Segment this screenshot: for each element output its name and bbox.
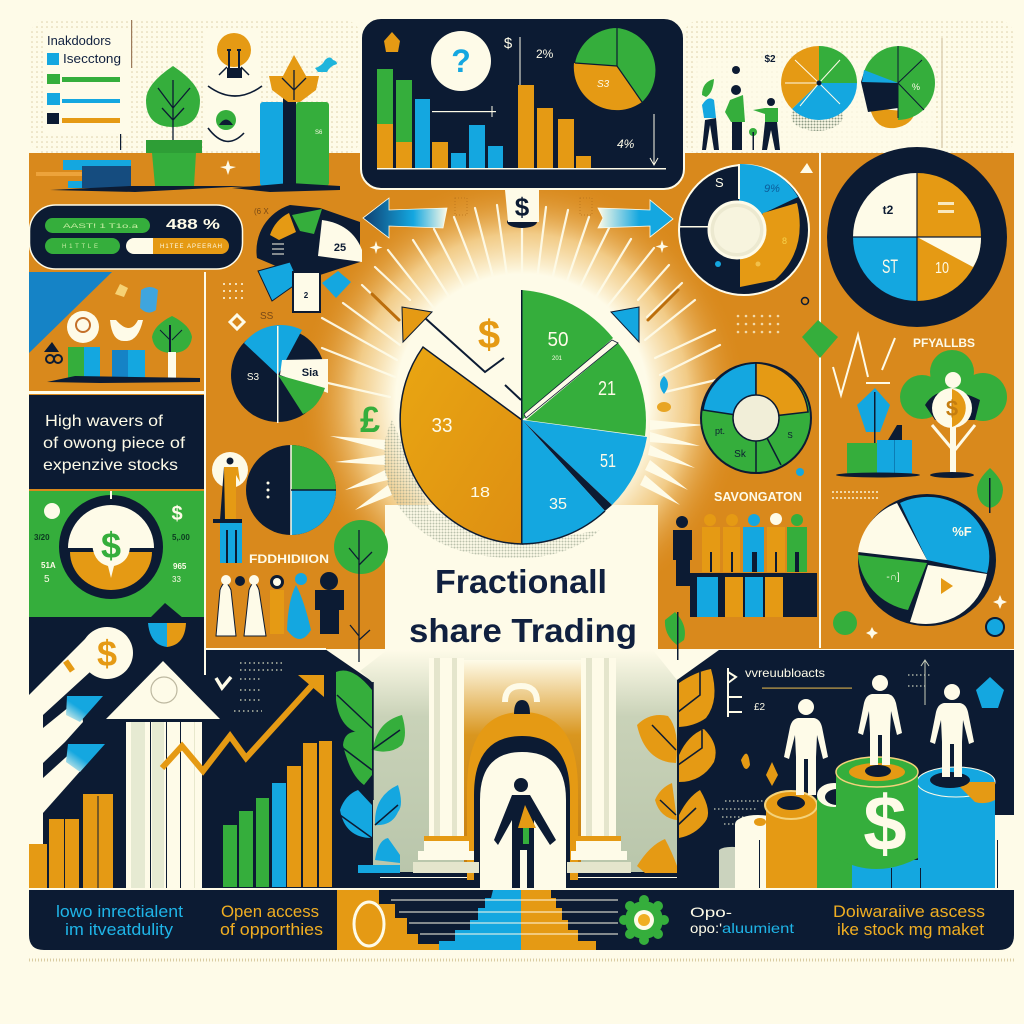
panel: stats pill	[30, 205, 242, 269]
text: downward access: ike stock mg maket	[837, 920, 984, 939]
bars right	[223, 741, 332, 887]
ground strip with boxes	[36, 160, 340, 192]
people figures	[784, 675, 974, 795]
panel: green savings circle: 3/20	[34, 533, 50, 542]
dotted footer line	[29, 958, 1015, 962]
text: open fulfilment: Opo-	[690, 904, 732, 920]
panel: dotted top background	[30, 20, 1014, 154]
panel: green savings circle: 33	[172, 575, 181, 584]
pie labels	[432, 329, 616, 513]
chart: big donut top right: ST	[882, 257, 898, 278]
icon: orange diamond	[384, 32, 400, 52]
chart: segmented gauge	[254, 205, 362, 312]
label: savonsaton: SAVONGATON	[714, 489, 802, 504]
title: Fractionall	[435, 563, 607, 600]
chart: segmented gauge: (6 X	[254, 207, 269, 216]
arrow: rising zigzag	[162, 675, 324, 771]
panel: stats pill: H1TEE APEERAH	[160, 244, 222, 250]
chart: pie with tag on left: Sia	[302, 367, 319, 379]
panel: high wavers text: of owong piece of	[43, 435, 186, 452]
chart: big donut top right	[827, 147, 1007, 327]
label: foundation: FDDHIDIION	[249, 554, 329, 566]
leaves right of arch	[637, 715, 692, 873]
chart: donut with centre circle: S	[715, 175, 724, 190]
panel: main orange background	[29, 153, 1014, 649]
orange leaves	[679, 669, 716, 838]
panel: green savings circle: 5,.00	[172, 533, 190, 542]
labels	[432, 35, 658, 165]
icon: kite and boxes	[836, 388, 920, 478]
central pie chart	[384, 290, 647, 558]
arrow and icons around central pie	[223, 283, 779, 440]
panel: arch with pillars	[360, 650, 706, 888]
label: header	[728, 666, 852, 717]
pie shadow	[384, 420, 600, 558]
cream central column	[385, 505, 658, 651]
dots	[714, 675, 930, 824]
icon: bell ornament	[505, 686, 537, 714]
icon: green diamond leaf	[802, 320, 838, 358]
pie labels: 51	[600, 451, 616, 471]
text: open fulfilment	[690, 904, 794, 936]
pie labels: 201	[552, 356, 563, 362]
arrow and icons around central pie: £	[360, 399, 380, 440]
legend	[47, 20, 132, 150]
chart: donut middle right: pt.	[715, 426, 725, 436]
chart: donut with centre circle	[679, 163, 813, 304]
cream cylinders	[719, 815, 1014, 888]
title: share Trading	[409, 612, 637, 649]
text: open access: Open access	[221, 902, 319, 921]
chart: pie lower right	[858, 494, 996, 626]
icon: small diamonds	[741, 754, 778, 786]
chart: pie with tag on left: SS	[260, 311, 274, 322]
icon: half circle	[148, 623, 186, 647]
panel: stats pill: AAST! 1 T1o.a	[63, 223, 139, 230]
panel: green savings circle: 965	[173, 562, 187, 571]
chart: pie with tag on left: S3	[247, 372, 260, 383]
chart: donut with centre circle: 9%	[764, 183, 780, 195]
cream left stripes	[29, 634, 90, 888]
legend: Isecctong	[63, 52, 121, 66]
chart: donut middle right: S	[787, 431, 793, 440]
pie labels: 50	[548, 329, 568, 351]
text: open fulfilment: opo:'	[690, 920, 722, 936]
pillar right	[567, 658, 631, 873]
panel: top centre bar and pie charts	[361, 18, 684, 189]
text: open fulfilment: aluumient	[722, 920, 794, 936]
sunburst behind central pie	[297, 175, 747, 625]
panel: high wavers text	[29, 395, 204, 489]
text: low investment: lowo inrectialent	[56, 902, 183, 921]
chart: donut middle right: Sk	[734, 449, 747, 460]
panel: green savings circle	[29, 491, 204, 618]
arch	[467, 712, 578, 888]
chart: top right pie one	[781, 46, 857, 131]
label: header: vvreuubloacts	[745, 666, 825, 680]
leaves left of arch	[336, 670, 405, 873]
icon: leaf right	[977, 468, 1003, 513]
chart: half and quarter pie	[246, 445, 336, 535]
navy floor strip	[373, 872, 683, 888]
chart: segmented gauge: 25	[334, 242, 346, 254]
green dollar coin: $	[863, 779, 907, 867]
icon: columns with orange leaf	[260, 55, 337, 186]
back green coin	[817, 783, 852, 888]
orange coin	[765, 791, 817, 888]
panel: bottom left navy with growth chart	[29, 617, 373, 888]
icon: padlock with dollar tag: $	[515, 192, 530, 222]
dotted grid	[234, 663, 282, 711]
icon: green tree	[334, 520, 388, 662]
chart: pie with tag on left	[231, 311, 328, 423]
icon: potted plant	[146, 66, 202, 186]
legend: Inakdodors	[47, 34, 111, 48]
title	[409, 563, 637, 649]
green dollar coin	[836, 757, 918, 869]
panel: bottom navy bar	[29, 890, 1014, 950]
pie labels: 33	[432, 415, 452, 437]
panel: high wavers text: expenzive stocks	[43, 457, 178, 474]
chart line: right panel zigzag	[833, 335, 895, 395]
chart: big donut top right: t2	[883, 203, 894, 217]
labels: 2%	[536, 47, 554, 61]
icon: money tree	[900, 350, 1007, 478]
arrow and icons around central pie: $	[478, 313, 500, 357]
icon: question bubble: ?	[451, 43, 471, 79]
directional arrows	[363, 198, 673, 238]
orange bars left	[29, 794, 113, 888]
chart: donut middle right	[701, 363, 811, 476]
icon: dollar pin: $	[97, 633, 117, 674]
slice: blue right	[522, 420, 647, 505]
icon: temple	[106, 661, 220, 888]
icon: dollar pin	[63, 627, 133, 679]
icon: padlock with dollar tag	[505, 177, 539, 228]
panel dividers	[204, 153, 821, 650]
icon: columns with orange leaf: S6	[315, 130, 323, 136]
chart: pie lower right: -∩]	[886, 572, 900, 583]
person entering arch	[494, 778, 556, 888]
slice: green right	[526, 343, 646, 436]
panel: green savings circle: 51A	[41, 561, 56, 570]
text: downward access: Doiwaraiive ascess	[833, 902, 985, 921]
text: downward access	[833, 902, 985, 939]
chart: segmented gauge: 2	[304, 291, 309, 300]
chart: big donut top right: 10	[935, 260, 949, 277]
pie labels: 18	[470, 484, 490, 501]
blue coins	[852, 767, 995, 888]
chart: pie lower right: %F	[952, 524, 972, 539]
labels: 4%	[617, 137, 635, 151]
panel: high wavers text: High wavers of	[45, 413, 164, 430]
panel: green savings circle: $	[171, 503, 183, 525]
pie labels: 35	[549, 496, 567, 513]
chart: top right pie two: %	[912, 82, 920, 92]
icon: group of people lower left	[216, 572, 344, 639]
panel: left icons	[29, 272, 204, 394]
icon: people with plant: $2	[764, 54, 776, 65]
labels: $	[504, 35, 513, 52]
label: pfyallbs: PFYALLBS	[913, 336, 975, 350]
icon: figure on pedestal	[212, 452, 248, 563]
icon: crowd of people	[673, 513, 817, 617]
slice: green top	[522, 290, 613, 420]
blue triangles	[66, 696, 103, 722]
text: open access	[220, 902, 323, 939]
icon: people with plant	[702, 54, 780, 150]
panel: green savings circle: $	[101, 525, 121, 566]
slice: orange	[400, 347, 522, 544]
panel: stats pill: 488 %	[166, 216, 220, 233]
pillar left	[413, 658, 479, 873]
pie labels: 21	[598, 378, 616, 400]
icon: question bubble	[431, 31, 491, 91]
stairs	[337, 890, 618, 950]
icon: check mark	[216, 677, 231, 688]
panel: green savings circle: 5	[44, 574, 50, 585]
icon: blue leaf	[976, 677, 1004, 708]
label: header: £2	[754, 702, 766, 713]
chart: top right pie two	[861, 46, 935, 128]
text: low investment	[56, 902, 183, 939]
pie chart: S3	[597, 79, 610, 90]
icon: small green leaf lower centre	[665, 612, 685, 660]
slice: blue bottom	[522, 420, 605, 544]
text: open access: of opporthies	[220, 920, 323, 939]
panel: bottom right navy with people on coins	[677, 650, 1014, 888]
panel: stats pill: H1TTLE	[62, 244, 98, 250]
bar chart	[377, 69, 666, 170]
icon: green flower	[619, 895, 669, 945]
icon: money tree: $	[946, 396, 958, 421]
text: low investment: im itveatdulity	[65, 920, 174, 939]
icon: light bulb with arcs	[208, 33, 262, 141]
pie chart	[574, 28, 655, 110]
icons: small circles and stars	[832, 492, 1007, 639]
chart: donut with centre circle: 8	[782, 236, 787, 246]
